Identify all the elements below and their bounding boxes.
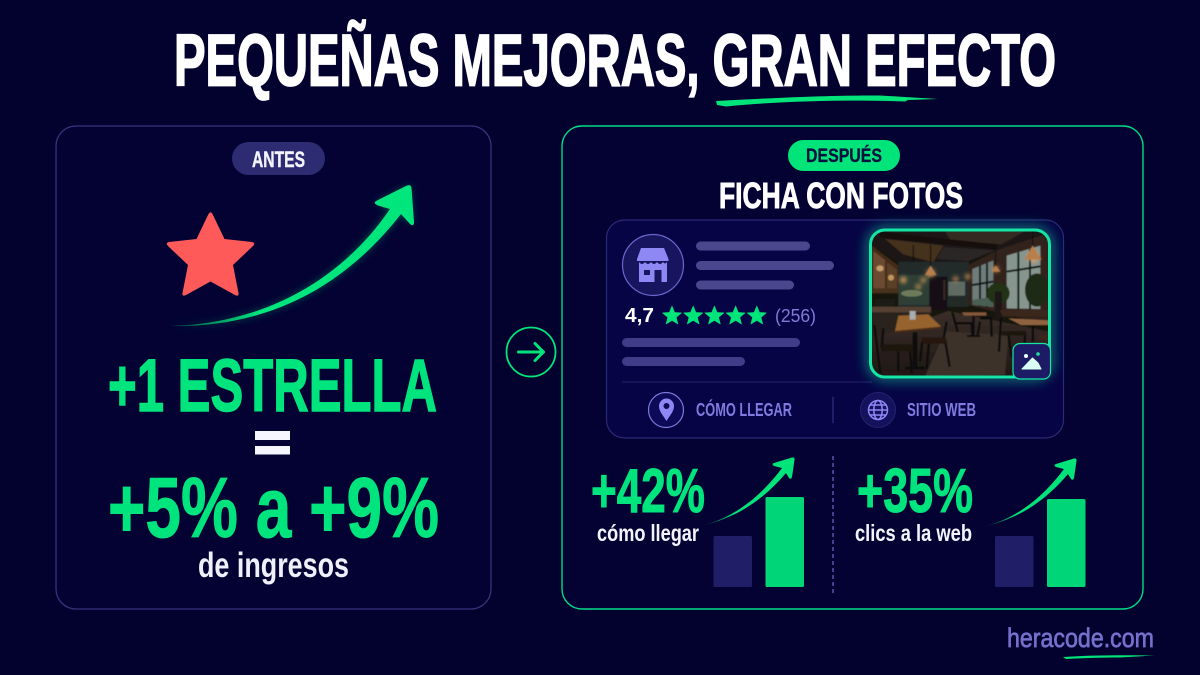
photo frame with glow [870,230,1050,379]
door [929,277,947,310]
ceiling [871,230,1050,262]
lamps [900,252,1038,289]
action: como llegar [648,392,792,428]
back tables [1000,310,1050,317]
arrow: growth curve [169,185,414,326]
stat: +35%: +35% [857,457,973,526]
rating: (256) [775,306,816,326]
photo: restaurant interior [871,230,1050,376]
front table [895,314,941,331]
stat: +35% [855,457,1086,587]
heading: ficha con fotos: FICHA CON FOTOS [719,175,963,216]
floor [871,311,1050,376]
title underline brush [716,95,938,106]
business card [606,220,1064,438]
picture on wall [948,282,965,296]
icon: store [622,234,684,296]
equals sign [255,431,290,454]
chairs [874,312,1025,373]
badge: despues [788,140,900,171]
rating [625,305,816,327]
left shelves [871,245,898,293]
arrow: antes to despues [506,328,556,376]
dashed divider [832,456,834,593]
placeholder lines lower [622,338,800,366]
badge: antes [232,142,325,175]
panel: despues [562,126,1155,659]
headline: +1 estrella: +1 ESTRELLA [108,344,437,427]
placeholder lines [696,242,834,290]
windows [972,260,993,307]
arrow: como llegar [700,457,795,526]
badge: antes: ANTES [252,147,305,172]
panel: antes [56,126,491,609]
brand: heracode.com: heracode.com [1007,623,1154,653]
stat: +42%: +42% [591,457,705,526]
headline: +5% a +9%: +5% a +9% [108,461,439,556]
caption: de ingresos: de ingresos [198,546,349,585]
icon: globe [860,392,896,428]
stat: +42% [591,457,804,587]
icon: red star [167,212,254,296]
plants [987,283,1010,304]
stat: +35%: clics a la web [855,520,972,546]
badge: despues: DESPUÉS [806,144,882,167]
action: como llegar: CÓMO LLEGAR [696,399,792,420]
bar chart: como llegar [714,497,804,587]
icon: image badge [1013,344,1050,379]
icon: pin [648,392,684,428]
action: sitio web: SITIO WEB [907,400,976,420]
back wall [898,262,969,307]
five green stars [662,306,766,324]
stat: +42%: cómo llegar [597,520,699,546]
rating: 4,7 [625,305,654,327]
action: sitio web [860,392,976,428]
right wall [968,233,1050,325]
bar chart: clics [995,499,1086,587]
arrow: clics [982,458,1077,527]
